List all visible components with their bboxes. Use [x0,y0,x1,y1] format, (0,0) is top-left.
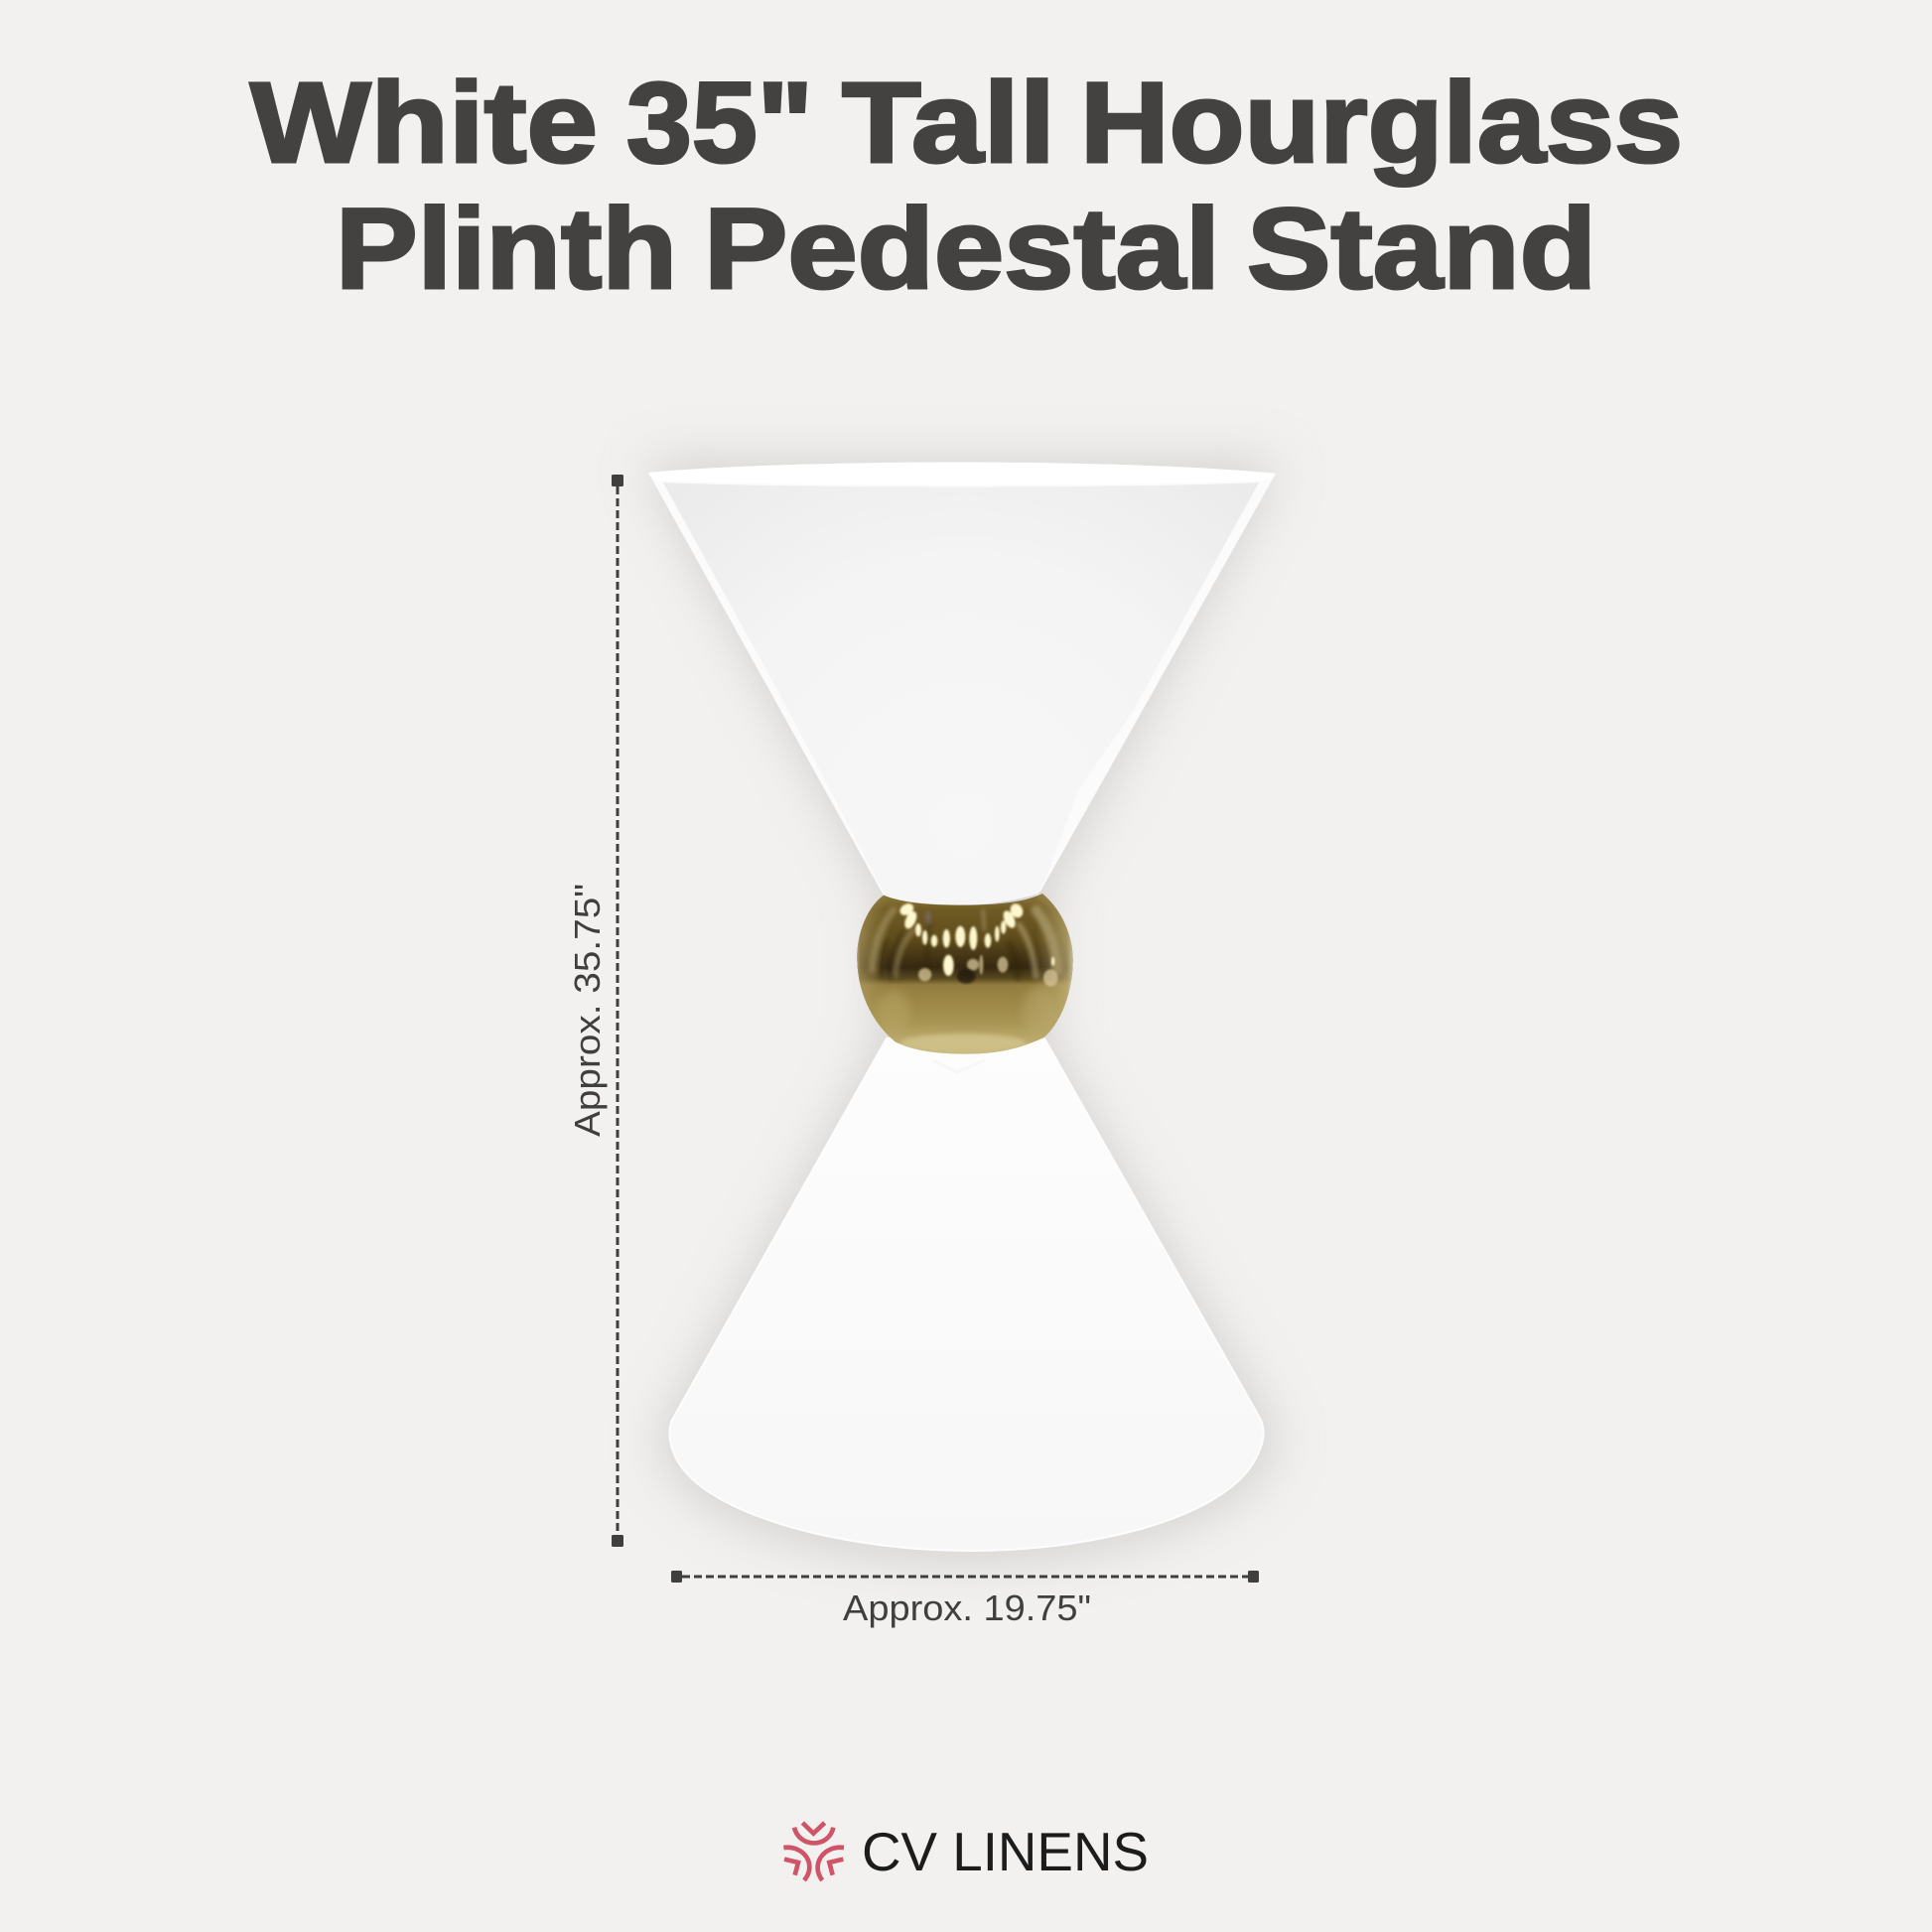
width label: Approx. 19.75" [843,1587,1091,1628]
title: Hourglass [1080,60,1683,187]
logo: CV Linens [783,1821,1149,1882]
height label: Approx. 35.75" [567,884,608,1137]
title: White [250,60,598,187]
title: 35" [626,60,813,187]
title: Plinth [336,186,677,313]
title: Stand [1247,186,1596,313]
width dimension line [671,1571,1259,1583]
infographic canvas [248,77,1680,1882]
icon: logo mark [783,1823,844,1880]
height dimension line [612,475,623,1547]
gold sphere [854,887,1075,1059]
title: Pedestal [704,186,1220,313]
upper cone [648,463,1276,905]
logo wordmark: CV LINENS [862,1821,1149,1882]
soft shadow [643,463,1281,1561]
title: Tall [842,60,1055,187]
title [250,60,1683,313]
product: hourglass pedestal [643,463,1281,1561]
lower cone [669,1038,1264,1551]
